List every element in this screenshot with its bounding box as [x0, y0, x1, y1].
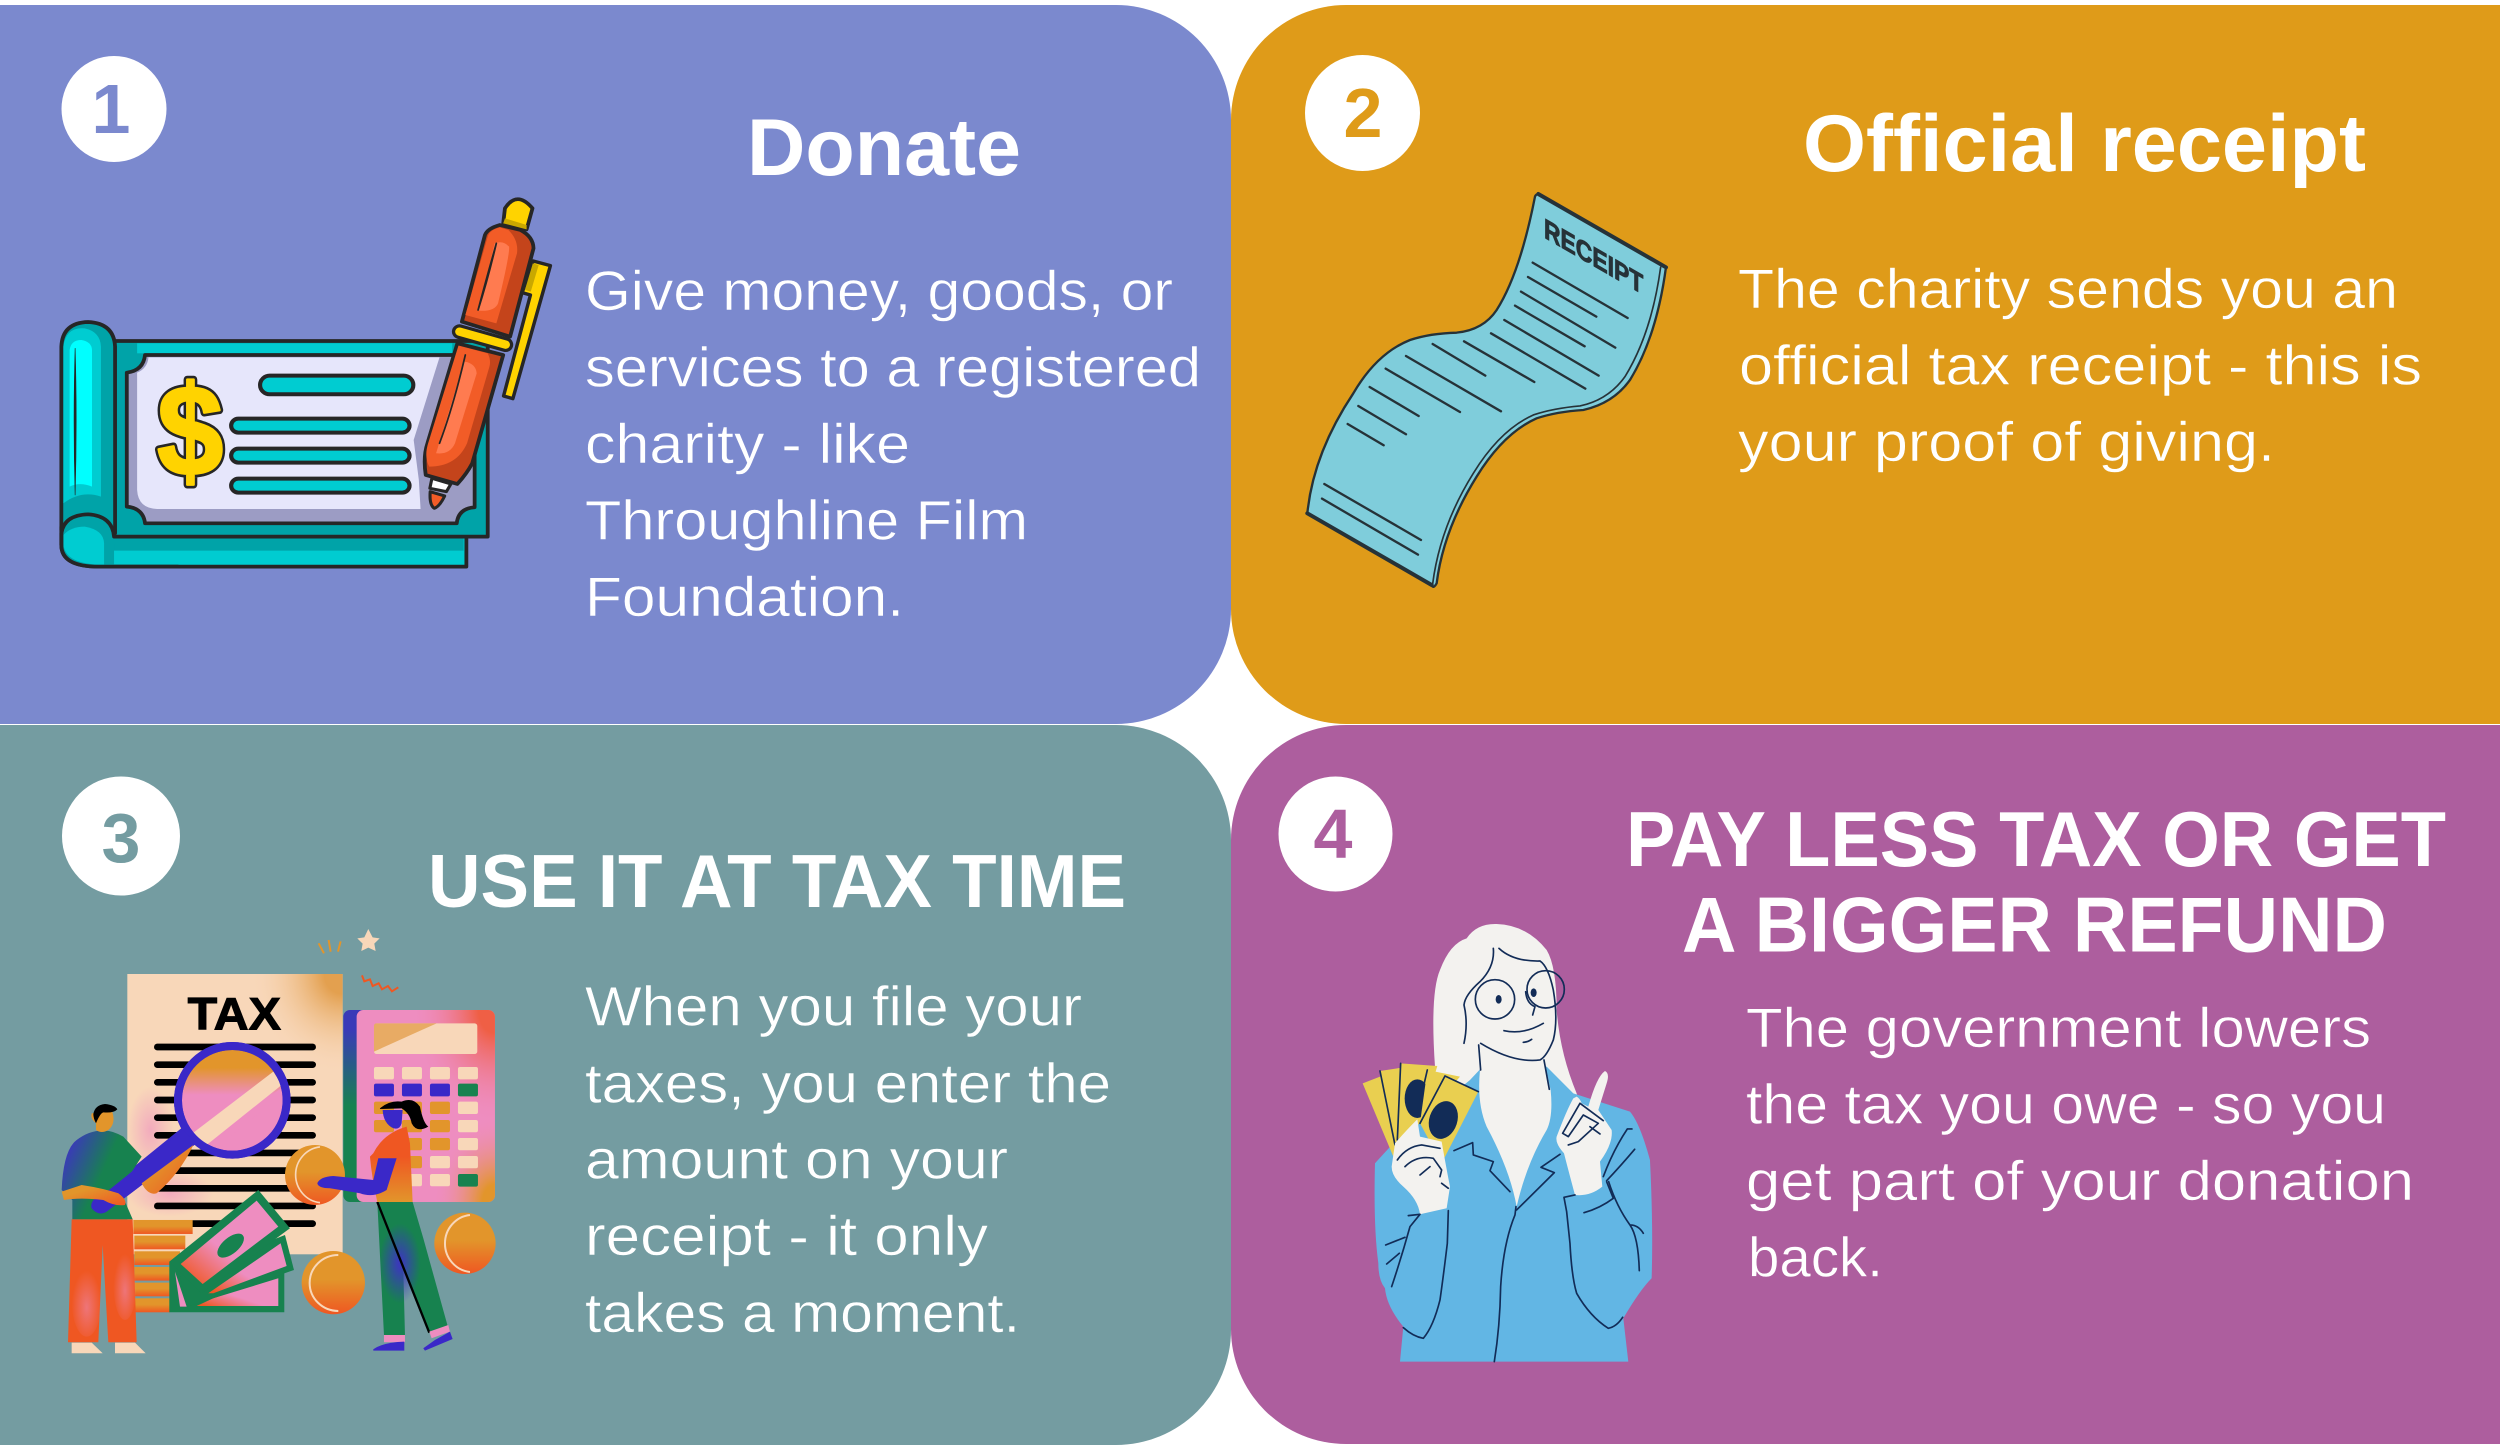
- man with magnifying glass: [62, 1104, 197, 1353]
- tax document: [127, 974, 343, 1254]
- pen cap: [503, 199, 532, 229]
- icon: curled receipt: [1307, 194, 1666, 587]
- panel: step 4 pay less tax: [1231, 725, 2500, 1444]
- hair: [1433, 924, 1583, 1123]
- body text: step 3: [585, 974, 1111, 1344]
- number badge 1: [62, 56, 166, 162]
- cheque book lower band: [61, 527, 466, 567]
- cheque text bars: [231, 376, 413, 493]
- pen clip: [504, 261, 550, 399]
- body text: step 1: [585, 259, 1201, 628]
- body text: step 4: The government lowers: [1746, 996, 2371, 1059]
- body text: step 3: amount on your: [585, 1128, 1008, 1190]
- number badge 2: 2: [1344, 74, 1382, 152]
- face and outline strokes: [1386, 948, 1643, 1362]
- dollar sign: $: [157, 359, 223, 503]
- magnifying glass: [91, 1046, 287, 1214]
- number badge 3: [62, 776, 180, 896]
- neck and chest: [1479, 1043, 1551, 1207]
- receipt heading: RECEIPT: [1544, 213, 1644, 301]
- coin: right: [434, 1213, 496, 1274]
- body text: step 1: Foundation.: [585, 565, 904, 628]
- body text: step 3: When you file your: [585, 974, 1082, 1038]
- banknote fan: [1363, 1063, 1478, 1163]
- number badge 3: 3: [102, 799, 140, 877]
- cheque slip: [127, 355, 475, 523]
- dollar sign: $: [157, 359, 223, 503]
- body text: step 1: Give money, goods, or: [585, 259, 1173, 322]
- number badge 2: [1305, 55, 1420, 171]
- coin: bottom: [302, 1251, 365, 1314]
- panel: step 1 donate: [0, 5, 1231, 724]
- body text: step 2: official tax receipt - this is: [1739, 334, 2422, 396]
- heading: PAY LESS TAX OR GET A BIGGER REFUND: PAY LESS TAX OR GET: [1626, 795, 2446, 883]
- heading: Official receipt: Official receipt: [1803, 99, 2366, 189]
- cheque book page: [114, 341, 488, 537]
- body text: step 2: your proof of giving.: [1738, 410, 2275, 473]
- body text: step 1: charity - like: [585, 412, 910, 475]
- banknotes: [169, 1190, 294, 1312]
- body text: step 4: back.: [1748, 1226, 1883, 1288]
- heading: PAY LESS TAX OR GET A BIGGER REFUND: A BIGGER REFUND: [1682, 880, 2387, 968]
- body text: step 1: services to a registered: [585, 336, 1201, 398]
- right hand: [1556, 1071, 1612, 1195]
- pen lower barrel: [425, 343, 503, 484]
- coin: back: [285, 1145, 345, 1205]
- pupils: [1496, 988, 1537, 1004]
- body text: step 4: [1746, 996, 2414, 1288]
- number badge 4: 4: [1314, 795, 1353, 873]
- body text: step 2: The charity sends you an: [1738, 257, 2398, 320]
- body text: step 3: receipt - it only: [585, 1204, 988, 1267]
- illustration: woman holding cash: [1363, 924, 1652, 1362]
- pen collar: [459, 332, 506, 345]
- woman with coin: [317, 1100, 453, 1351]
- body text: step 2: [1738, 257, 2422, 473]
- receipt lines: [1322, 263, 1628, 555]
- body text: step 3: takes a moment.: [585, 1281, 1020, 1344]
- icon: cheque book and pen: [61, 199, 550, 567]
- heading: PAY LESS TAX OR GET A BIGGER REFUND: [1626, 795, 2446, 968]
- heading: Donate: Donate: [747, 103, 1021, 193]
- receipt paper: [1307, 194, 1666, 587]
- calculator: [343, 1010, 495, 1202]
- number badge 4: [1278, 776, 1392, 892]
- body text: step 4: the tax you owe - so you: [1746, 1072, 2386, 1136]
- body text: step 3: taxes, you enter the: [585, 1052, 1111, 1114]
- number badge 1: 1: [92, 70, 130, 148]
- heading: USE IT AT TAX TIME: USE IT AT TAX TIME: [428, 839, 1126, 923]
- scroll roll: [61, 322, 178, 567]
- panel: step 2 official receipt: [1231, 5, 2500, 724]
- sparkle star and marks: [319, 929, 398, 991]
- pen tip: [430, 478, 451, 508]
- body text: step 4: get part of your donation: [1746, 1149, 2414, 1212]
- panel: step 3 use it at tax time: [0, 725, 1231, 1445]
- jacket: [1375, 1067, 1652, 1362]
- tax document: TAX: [188, 988, 281, 1039]
- body text: step 1: Throughline Film: [585, 488, 1028, 552]
- pen upper barrel: [462, 225, 534, 337]
- left hand: [1392, 1119, 1450, 1214]
- coin stack: [133, 1220, 193, 1312]
- illustration: tax filing scene: [62, 929, 496, 1353]
